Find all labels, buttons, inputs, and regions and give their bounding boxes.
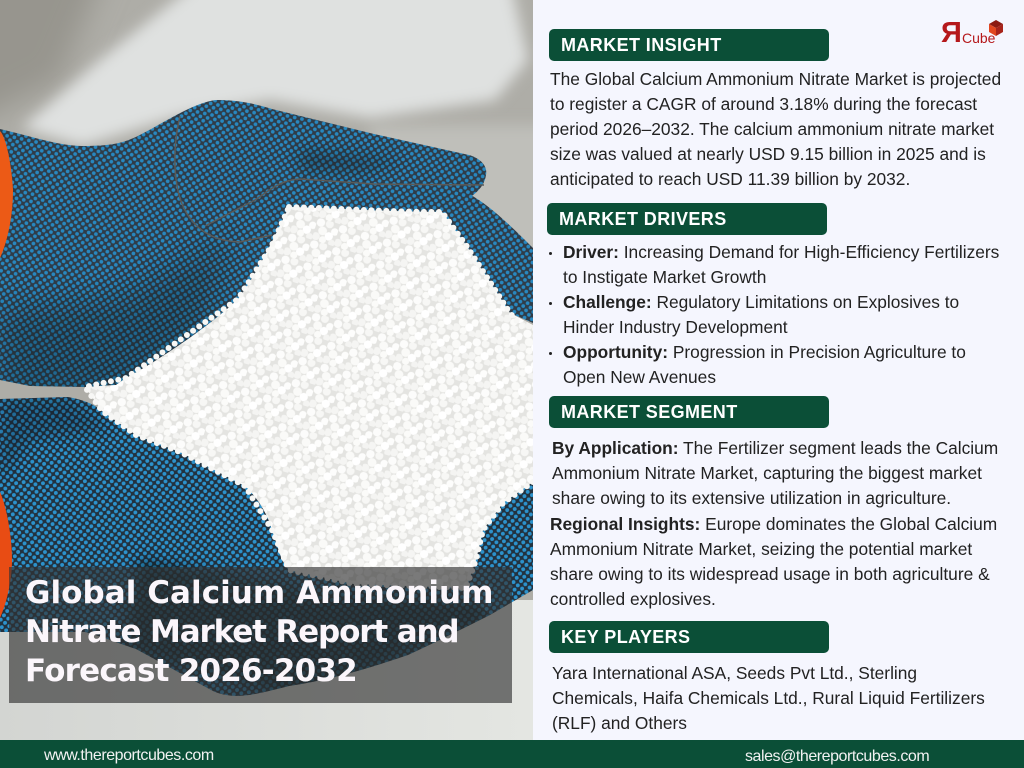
- icon: red cube: [989, 20, 1003, 36]
- text: regional insights: controlled explosives.: [550, 589, 716, 609]
- list: drivers: Open New Avenues: [563, 367, 716, 387]
- text: segment by application: By Application: The Fertilizer segment leads the Calcium: [552, 438, 998, 458]
- logo word: Cube: [962, 30, 995, 46]
- text: key players: Yara International ASA, Seeds Pvt Ltd., Sterling: [552, 663, 917, 683]
- right part of lower glove: [466, 482, 533, 615]
- title: Nitrate Market Report and: [25, 614, 458, 650]
- list: drivers: Opportunity: Progression in Precision Agriculture to: [563, 342, 966, 362]
- text: regional insights: share owing to its widespread usage in both agriculture &: [550, 564, 990, 584]
- text: segment by application: share owing to its extensive utilization in agriculture.: [552, 488, 951, 508]
- list: drivers: [549, 242, 999, 387]
- right part of upper glove: [442, 194, 533, 323]
- text: market insight: period 2026–2032. The calcium ammonium nitrate market: [550, 119, 994, 139]
- upper glove: [0, 95, 490, 400]
- orange lower cuff: [0, 492, 12, 618]
- text: market insight: anticipated to reach USD 11.39 billion by 2032.: [550, 169, 910, 189]
- logo mark letter: Я: [941, 17, 962, 49]
- heading: market drivers: [547, 203, 827, 235]
- text: key players: [552, 663, 985, 733]
- text: market insight: size was valued at nearly USD 9.15 billion in 2025 and is: [550, 144, 986, 164]
- footer email: sales@thereportcubes.com: [745, 748, 929, 765]
- list: drivers: Challenge: Regulatory Limitations on Explosives to: [563, 292, 959, 312]
- text: key players: Chemicals, Haifa Chemicals Ltd., Rural Liquid Fertilizers: [552, 688, 985, 708]
- shading on upper glove: [0, 240, 230, 400]
- heading: market segment: [549, 396, 829, 428]
- glove seams: [175, 116, 484, 242]
- heading: key players: [549, 621, 829, 653]
- text: market insight: [550, 69, 1001, 189]
- text: key players: (RLF) and Others: [552, 713, 687, 733]
- text: market insight: The Global Calcium Ammonium Nitrate Market is projected: [550, 69, 1001, 89]
- list: drivers: Driver: Increasing Demand for High-Efficiency Fertilizers: [563, 242, 999, 262]
- list: drivers: to Instigate Market Growth: [563, 267, 766, 287]
- title: Global Calcium Ammonium: [25, 575, 493, 611]
- title: Forecast 2026-2032: [25, 653, 357, 689]
- lower glove: [0, 395, 495, 700]
- white granules: [85, 207, 533, 588]
- photo: gloved hands holding white granules: [0, 0, 533, 740]
- text: regional insights: Ammonium Nitrate Market, seizing the potential market: [550, 539, 972, 559]
- text: segment by application: Ammonium Nitrate Market, capturing the biggest market: [552, 463, 982, 483]
- footer website: www.thereportcubes.com: [44, 747, 214, 764]
- logo: RCube: [941, 17, 1003, 49]
- title: [25, 575, 493, 689]
- heading: market insight: MARKET INSIGHT: [561, 35, 722, 55]
- heading: key players: KEY PLAYERS: [561, 627, 690, 647]
- list: drivers: Hinder Industry Development: [563, 317, 788, 337]
- text: regional insights: [550, 514, 997, 609]
- heading: market insight: [549, 29, 829, 61]
- text: segment by application: [552, 438, 998, 508]
- shading on lower glove: [0, 395, 110, 480]
- footer bar: [0, 740, 1024, 768]
- background cloth: [0, 0, 570, 740]
- text: regional insights: Regional Insights: Europe dominates the Global Calcium: [550, 514, 997, 534]
- orange upper cuff: [0, 131, 13, 258]
- title overlay panel: [9, 567, 512, 703]
- heading: market segment: MARKET SEGMENT: [561, 402, 738, 422]
- heading: market drivers: MARKET DRIVERS: [559, 209, 727, 229]
- text: market insight: to register a CAGR of around 3.18% during the forecast: [550, 94, 977, 114]
